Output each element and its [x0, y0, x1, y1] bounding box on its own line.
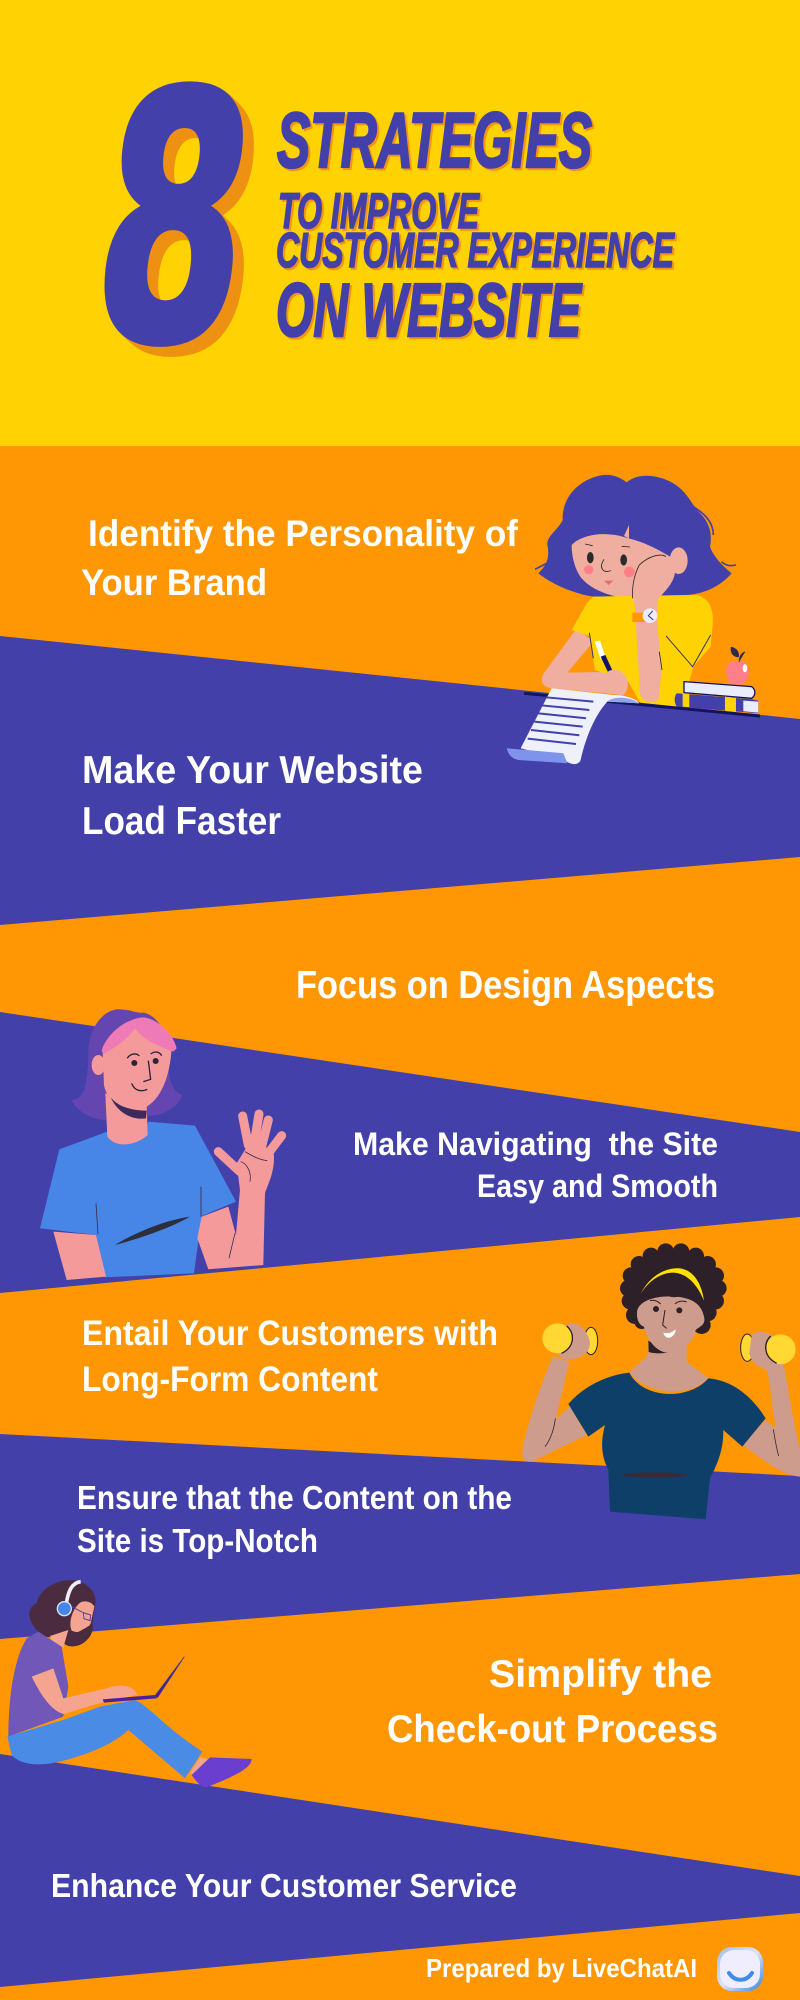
left arm: [522, 1357, 587, 1462]
shirt collar line: [589, 633, 711, 667]
headphones: [57, 1582, 81, 1616]
neck shadow: [648, 1341, 668, 1353]
face: [70, 1601, 94, 1632]
ankle: [190, 1757, 210, 1776]
illustration: woman with dumbbells: [522, 1243, 800, 1519]
heading: top-notch content: Site is Top-Notch: [77, 1522, 318, 1559]
writing hand: [593, 670, 628, 695]
title: ON WEBSITE: [276, 268, 582, 352]
band: purple 4: [0, 1754, 800, 1987]
laptop: [103, 1657, 184, 1703]
illustration: woman with laptop: [7, 1580, 252, 1787]
heading: identify the personality: Identify the Personality of: [88, 513, 519, 554]
heading: check-out: Check-out Process: [387, 1708, 718, 1751]
left arm: [542, 628, 627, 695]
heading: load faster: Load Faster: [82, 800, 281, 843]
shirt fold: [115, 1217, 190, 1245]
band: purple 1: [0, 636, 800, 925]
jeans: [7, 1700, 202, 1778]
desk edge: [524, 693, 760, 716]
ear: [92, 1055, 105, 1075]
heading: navigating: [353, 1126, 718, 1204]
panel: yellow header: [0, 0, 800, 446]
heading: long-form content: Long-Form Content: [82, 1360, 378, 1399]
hair: [72, 1009, 182, 1121]
fringe: [642, 1280, 703, 1307]
title: TO IMPROVE: [278, 183, 480, 239]
heading: navigating: Make Navigating the Site: [353, 1126, 718, 1162]
heading: identify the personality: [81, 513, 519, 603]
facial features: [584, 525, 635, 585]
heading: load faster: [82, 749, 423, 843]
shirt: [572, 595, 713, 707]
fringe: [102, 1017, 177, 1054]
heading: top-notch content: [77, 1479, 512, 1559]
band: purple 3: [0, 1434, 800, 1639]
big number 8: 8: [77, 20, 271, 420]
stray hair strands: [535, 507, 736, 569]
arm: [32, 1668, 137, 1714]
hair: [620, 1243, 727, 1334]
heading: check-out: [387, 1653, 718, 1751]
icon: LiveChatAI logo: [717, 1947, 763, 1991]
front hair curl: [63, 1623, 93, 1646]
neck shadow: [111, 1097, 147, 1119]
shirt: [40, 1122, 236, 1277]
pen: [595, 641, 614, 675]
neck: [50, 1630, 68, 1647]
heading: long-form content: Entail Your Customers with: [82, 1314, 498, 1353]
face: [572, 534, 673, 599]
left arm: [53, 1232, 106, 1280]
title: [276, 96, 675, 352]
arm creases: [545, 1418, 779, 1456]
shirt: [568, 1373, 766, 1519]
books: [675, 682, 758, 713]
crease lines: [96, 1152, 267, 1258]
heading: navigating: Easy and Smooth: [477, 1168, 718, 1204]
apple: [726, 647, 749, 685]
heading: long-form content: [82, 1314, 498, 1399]
illustration: girl writing at desk: [507, 475, 760, 764]
band: purple 2: [0, 1012, 800, 1293]
shirt fold: [622, 1472, 688, 1478]
left dumbbell: [542, 1323, 598, 1359]
title: STRATEGIES: [277, 96, 592, 184]
right arm and palm: [197, 1142, 274, 1269]
right arm: [743, 1367, 800, 1477]
right dumbbell: [741, 1332, 796, 1370]
illustration: woman waving: [40, 1009, 282, 1280]
facial features: [127, 1052, 162, 1091]
glasses: [72, 1607, 91, 1621]
paper roll: [507, 688, 639, 764]
fingers: [218, 1114, 282, 1172]
back hair: [29, 1580, 96, 1646]
face: [637, 1296, 704, 1353]
footer credit: Prepared by LiveChatAI: [426, 1953, 697, 1983]
heading: load faster: Make Your Website: [82, 749, 423, 792]
neck: [629, 1343, 708, 1391]
watch: [632, 608, 657, 623]
heading: customer service: Enhance Your Customer Service: [51, 1867, 517, 1904]
ear: [670, 547, 688, 574]
heading: top-notch content: Ensure that the Content on the: [77, 1479, 512, 1516]
facial features: [650, 1300, 687, 1338]
panel: orange background: [0, 446, 800, 2000]
shoe: [192, 1757, 252, 1787]
heading: design aspects: Focus on Design Aspects: [296, 964, 715, 1007]
heading: identify the personality: Your Brand: [81, 562, 267, 603]
heading: check-out: Simplify the: [489, 1653, 712, 1696]
neck front: [105, 1093, 148, 1144]
hand and forearm: [633, 557, 675, 702]
shirt: [8, 1632, 68, 1737]
headband: [641, 1268, 704, 1301]
face: [103, 1027, 172, 1111]
hair: [538, 475, 732, 597]
